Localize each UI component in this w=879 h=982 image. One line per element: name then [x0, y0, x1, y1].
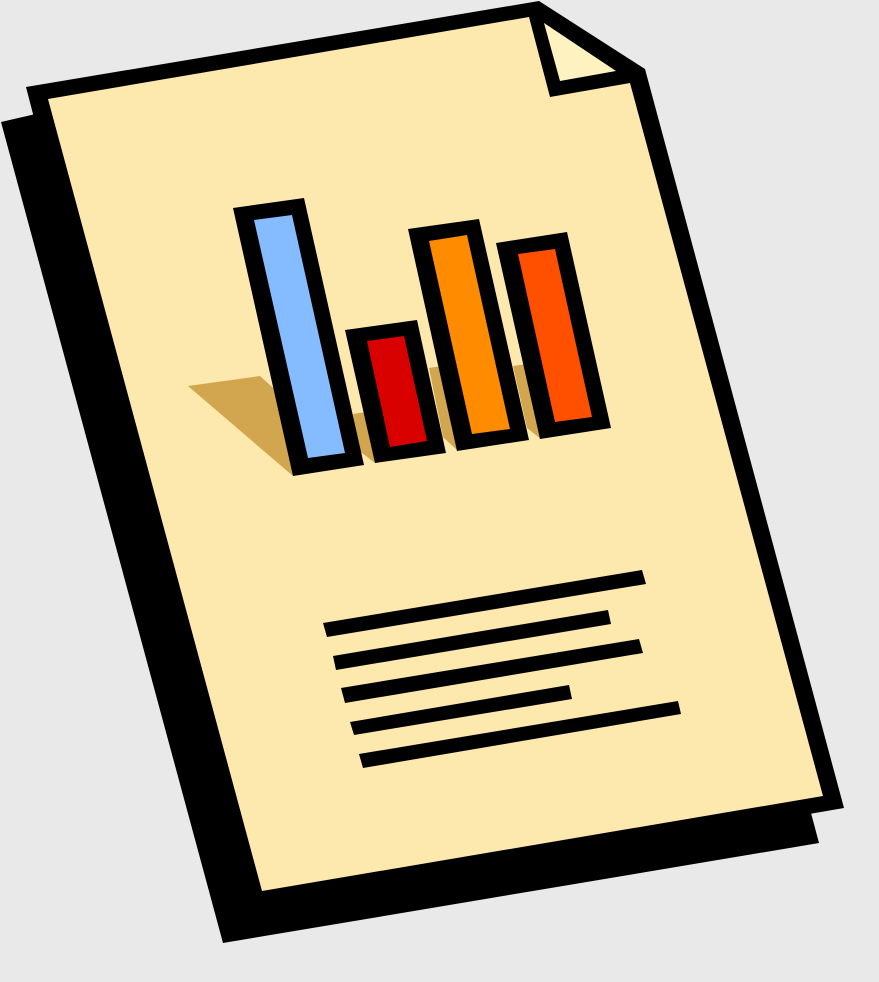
bar: orange [496, 232, 611, 439]
bar: blue [233, 198, 364, 476]
bar chart [233, 198, 611, 476]
folded corner [544, 23, 616, 81]
text lines [323, 570, 681, 768]
bar: red [345, 320, 446, 463]
page sheet [48, 17, 823, 891]
page drop shadow [1, 113, 819, 943]
chart floor shadow [188, 364, 541, 476]
bar: amber [408, 219, 529, 451]
